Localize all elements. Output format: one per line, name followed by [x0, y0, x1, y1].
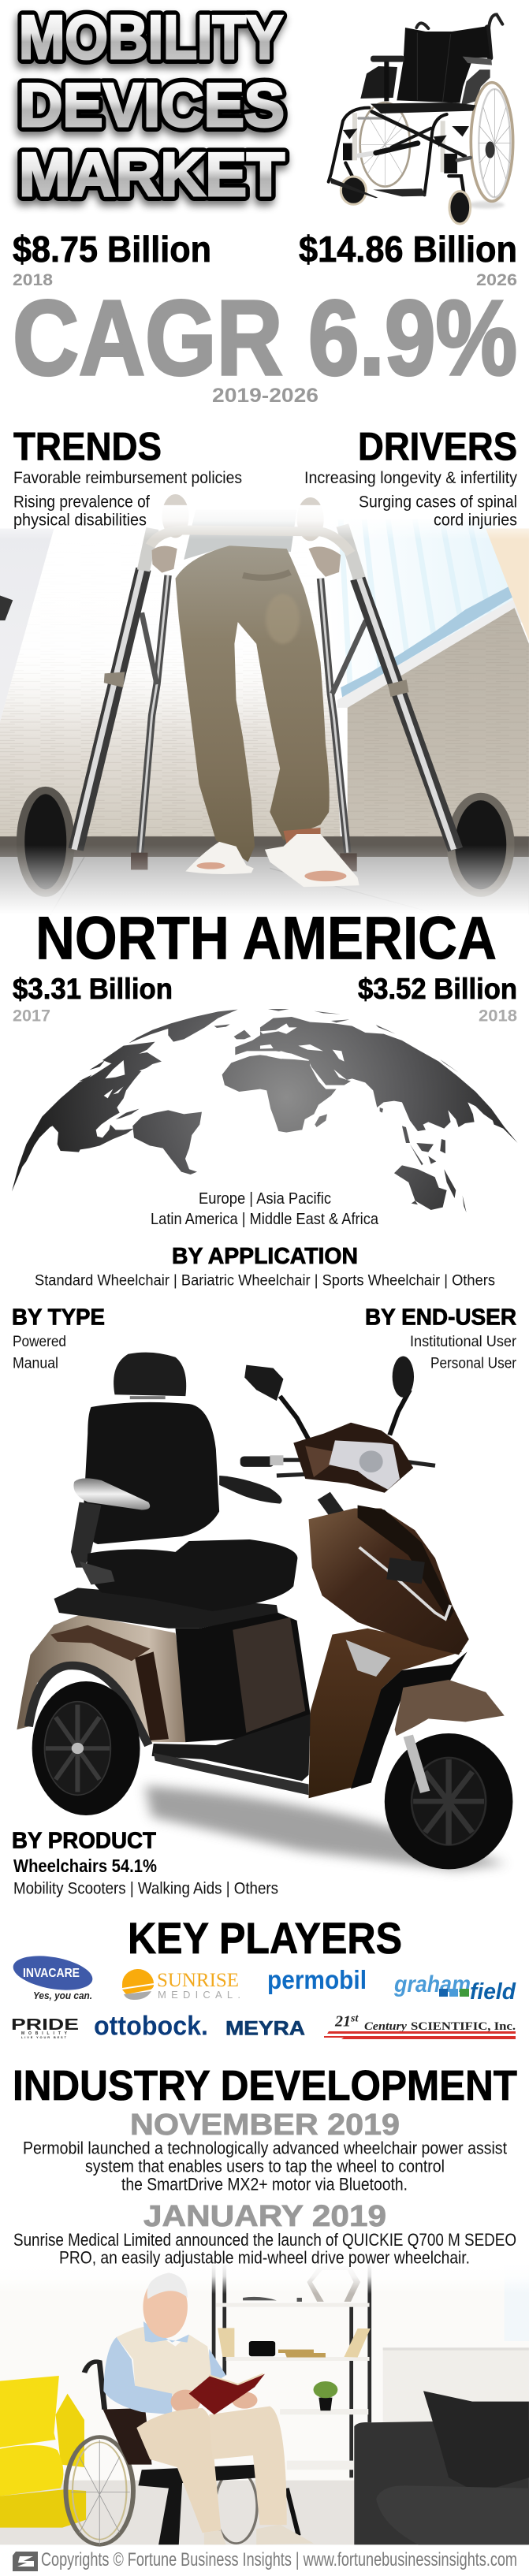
by type — [12, 1305, 105, 1372]
by type: Manual — [13, 1356, 58, 1372]
trends list: physical disabilities — [13, 511, 147, 530]
drivers list: Surging cases of spinal — [359, 493, 517, 512]
market value 2018: 2018 — [13, 271, 53, 289]
drivers list: cord injuries — [434, 511, 517, 530]
logo: invacare: INVACARE — [23, 1967, 80, 1980]
by type: Powered — [13, 1334, 66, 1350]
drivers list: Increasing longevity & infertility — [304, 469, 517, 487]
logo: 21st century scientific — [324, 2013, 516, 2039]
north america 2017 value: $3.31 Billion — [13, 973, 173, 1005]
logo: graham field — [393, 1971, 516, 2005]
title: MOBILITY — [19, 2, 283, 72]
logo: pride mobility: PRIDE — [11, 2016, 79, 2034]
logo: pride mobility: LIVE YOUR BEST — [21, 2035, 67, 2039]
trends list: Favorable reimbursement policies — [13, 469, 242, 487]
heading: key players: KEY PLAYERS — [128, 1913, 402, 1963]
by product: Mobility Scooters | Walking Aids | Others — [13, 1880, 278, 1898]
by end-user: Personal User — [430, 1356, 517, 1372]
by end-user: BY END-USER — [365, 1305, 516, 1331]
north america 2018 value — [358, 973, 517, 1026]
by end-user — [365, 1305, 517, 1372]
CAGR: 2019-2026 — [212, 385, 319, 407]
north america 2017 value: 2017 — [13, 1007, 50, 1026]
title: MARKET — [19, 140, 285, 209]
heading: trends: TRENDS — [13, 424, 162, 468]
title: DEVICES — [19, 70, 285, 140]
heading: drivers: DRIVERS — [358, 424, 517, 468]
development: november 2019: NOVEMBER 2019 — [130, 2109, 400, 2142]
logo: meyra: MEYRA — [225, 2018, 305, 2040]
north america 2018 value: 2018 — [479, 1007, 517, 1026]
other regions: Latin America | Middle East & Africa — [151, 1211, 379, 1228]
other regions: Europe | Asia Pacific — [199, 1190, 331, 1208]
by product — [12, 1828, 278, 1898]
development: january 2019: PRO, an easily adjustable mid-wheel drive power wheelchair. — [59, 2248, 470, 2268]
development: november 2019: system that enables users to tap the wheel to control — [85, 2156, 445, 2176]
icon: wheelchair photo — [329, 14, 513, 224]
logo: pride mobility — [11, 2016, 79, 2039]
by application — [35, 1244, 495, 1290]
logo: graham field: field — [470, 1979, 516, 2005]
title: MARKET — [19, 140, 285, 209]
market value 2026 — [299, 229, 517, 289]
title: DEVICES — [19, 70, 285, 140]
logo: permobil: permobil — [267, 1965, 367, 1994]
market value 2018: $8.75 Billion — [13, 229, 211, 270]
title — [19, 2, 285, 209]
by end-user: Institutional User — [410, 1334, 517, 1350]
logo: 21st century scientific: Century — [364, 2020, 407, 2033]
trends list: Rising prevalence of — [13, 493, 150, 512]
drivers list — [304, 469, 517, 530]
title: MOBILITY — [19, 2, 283, 72]
market value 2026: $14.86 Billion — [299, 229, 517, 270]
world map — [12, 1009, 518, 1212]
photo: man in wheelchair reading — [0, 2262, 529, 2544]
photo: mobility scooter — [17, 1353, 512, 1870]
market value 2026: 2026 — [476, 271, 517, 289]
logo: pride mobility: MOBILITY — [21, 2031, 68, 2036]
by application: BY APPLICATION — [172, 1244, 358, 1269]
logo: sunrise medical: SUNRISE — [157, 1970, 239, 1991]
photo: person with walker — [0, 494, 529, 914]
by product: Wheelchairs 54.1% — [13, 1856, 157, 1876]
logo: graham field: graham — [393, 1971, 471, 1997]
logo: 21st century scientific: SCIENTIFIC, Inc. — [411, 2020, 516, 2033]
other regions — [151, 1190, 379, 1228]
logo: invacare: Yes, you can. — [33, 1990, 92, 2001]
development: january 2019 — [13, 2200, 516, 2268]
logo: ottobock: ottobock. — [94, 2012, 208, 2042]
development: november 2019 — [23, 2109, 507, 2194]
logo: sunrise medical — [122, 1969, 240, 2001]
by product: BY PRODUCT — [12, 1828, 156, 1853]
logo: 21st century scientific: 21 — [335, 2013, 351, 2031]
icon: fortune business insights — [13, 2552, 38, 2571]
trends list — [13, 469, 242, 530]
north america 2017 value — [13, 973, 173, 1026]
logo: sunrise medical: MEDICAL. — [158, 1989, 240, 2001]
development: january 2019: JANUARY 2019 — [143, 2200, 386, 2233]
logo: invacare — [10, 1950, 95, 2001]
market value 2018 — [13, 229, 211, 289]
development: november 2019: the SmartDrive MX2+ motor via Bluetooth. — [121, 2174, 408, 2194]
logo: 21st century scientific: st — [350, 2013, 359, 2025]
by type: BY TYPE — [12, 1305, 105, 1331]
by application: Standard Wheelchair | Bariatric Wheelchair | Sports Wheelchair | Others — [35, 1273, 495, 1290]
north america 2018 value: $3.52 Billion — [358, 973, 517, 1005]
